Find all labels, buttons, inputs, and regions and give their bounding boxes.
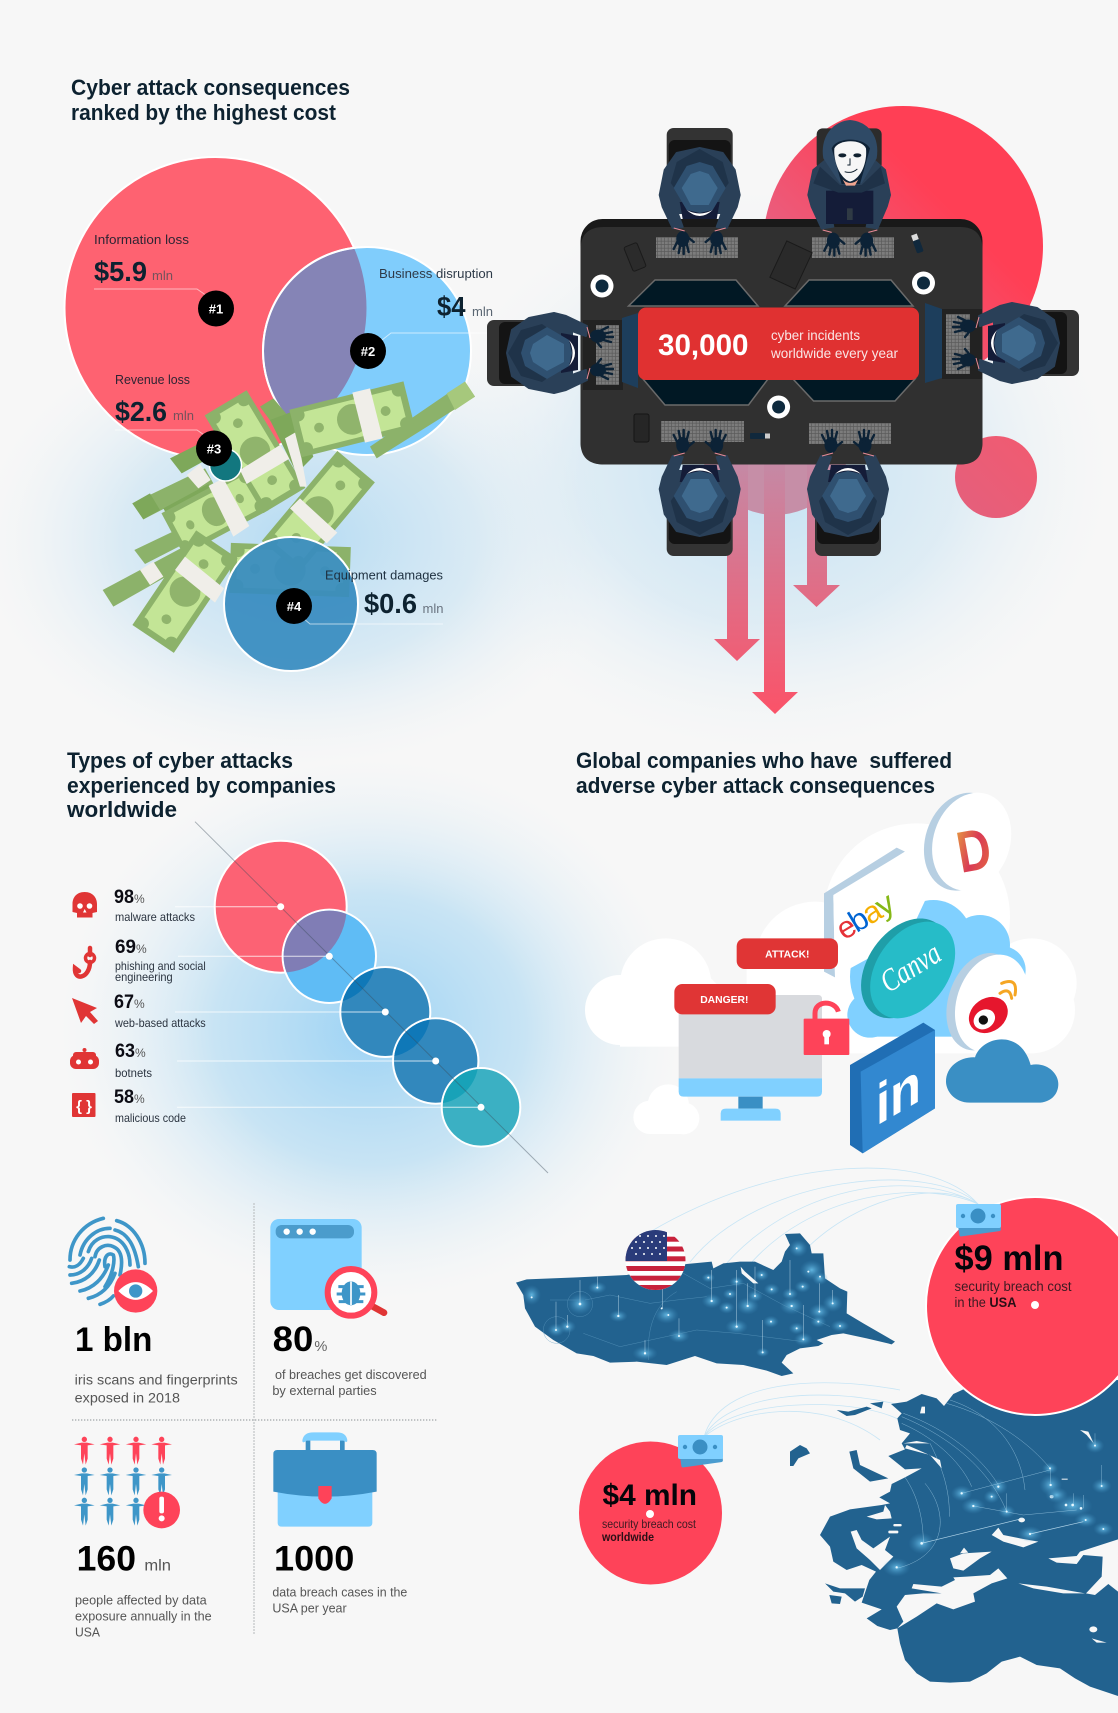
icon: code brackets: { } bbox=[76, 1098, 92, 1115]
overlap 3 bbox=[394, 1020, 430, 1056]
red banner: cyber incidents bbox=[771, 327, 860, 343]
title: types of cyber attacks: Types of cyber attacks bbox=[67, 748, 293, 773]
title: cyber attack consequences bbox=[71, 75, 350, 125]
keyboard: top right bbox=[812, 237, 894, 258]
logo: canva bbox=[843, 902, 973, 1035]
stat: 1 bln bbox=[75, 1321, 238, 1406]
logo: ebay panel: b bbox=[843, 901, 875, 939]
coffee cup 3 bbox=[767, 396, 790, 418]
stat: 1000: 1000 bbox=[274, 1540, 354, 1579]
icon: code brackets bbox=[72, 1093, 96, 1117]
hacker: bottom right bbox=[808, 430, 888, 556]
arrow right bbox=[793, 460, 840, 607]
big red circle bbox=[763, 106, 1043, 386]
list item: malware: 98 bbox=[114, 887, 134, 908]
list item: botnets bbox=[115, 1041, 152, 1080]
diagonal axis bbox=[195, 822, 548, 1173]
logo: linkedin: in bbox=[876, 1049, 921, 1138]
icon: fingerprint bbox=[69, 1218, 145, 1304]
callout: $4 mln: security breach cost bbox=[602, 1517, 697, 1531]
phone bbox=[624, 242, 646, 272]
label: equipment damages: $0.6 bbox=[364, 588, 417, 619]
title: global companies bbox=[576, 748, 952, 798]
stat: 160 mln: exposure annually in the bbox=[75, 1610, 212, 1624]
red banner: worldwide every year bbox=[770, 345, 898, 361]
usb drive 2 bbox=[750, 433, 770, 439]
notebook bbox=[770, 241, 812, 289]
circle: business disruption bbox=[263, 247, 471, 455]
badge #2: #2 bbox=[361, 344, 375, 359]
company cloud illustration bbox=[585, 782, 1077, 1153]
dividers bbox=[72, 1203, 437, 1635]
logo: ebay panel: e bbox=[830, 909, 862, 947]
callout: $9 mln: in the USA bbox=[954, 1295, 1017, 1310]
stat: 1 bln: exposed in 2018 bbox=[75, 1390, 180, 1406]
usa flag bbox=[625, 1230, 687, 1291]
arrow left bbox=[714, 460, 760, 661]
icon: banknote bottom bbox=[678, 1435, 723, 1468]
callout: $4 mln: worldwide bbox=[601, 1530, 654, 1544]
badge #3: #3 bbox=[207, 442, 221, 456]
arrow centre bbox=[752, 460, 798, 714]
icon: hook bbox=[75, 948, 94, 977]
label: revenue loss: $2.6 bbox=[115, 396, 167, 427]
icon: browser window with bug bbox=[270, 1219, 384, 1316]
list item: phishing bbox=[115, 937, 206, 984]
stat: 1000 bbox=[272, 1540, 407, 1616]
stat: 1 bln: iris scans and fingerprints bbox=[75, 1371, 238, 1387]
label: information loss: $5.9 bbox=[94, 256, 147, 287]
label: revenue loss: Revenue loss bbox=[115, 372, 190, 387]
arc white edge bbox=[263, 248, 356, 423]
label: business disruption: mln bbox=[472, 304, 493, 319]
circle overlap bbox=[264, 249, 366, 414]
list item: botnets: botnets bbox=[115, 1066, 152, 1080]
cloud: light blue bbox=[847, 900, 1026, 1038]
monitor: right bbox=[925, 303, 942, 383]
label: equipment damages: mln bbox=[422, 601, 444, 616]
hacker: left bbox=[487, 313, 613, 393]
title: cyber attack consequences: Cyber attack consequences bbox=[71, 75, 350, 100]
phone 2 bbox=[634, 414, 649, 442]
red banner bbox=[638, 308, 919, 380]
stat: 1 bln: 1 bln bbox=[75, 1321, 152, 1359]
list item: phishing: % bbox=[136, 942, 147, 956]
map: USA bbox=[516, 1233, 895, 1376]
callout: $9 mln bbox=[926, 1197, 1118, 1415]
logo: linkedin bbox=[850, 1023, 935, 1153]
title: types of cyber attacks: worldwide bbox=[66, 797, 177, 822]
map arcs bbox=[650, 1168, 978, 1440]
bubble: attack: ATTACK! bbox=[765, 950, 810, 961]
label: revenue loss: mln bbox=[173, 408, 194, 423]
small teal circle bbox=[210, 449, 242, 481]
logo: ebay panel bbox=[824, 848, 930, 977]
icon: cursor bbox=[72, 998, 98, 1024]
circle: information loss bbox=[64, 157, 366, 459]
stat: 160 mln: 160 bbox=[77, 1540, 136, 1579]
map: world bbox=[790, 1380, 1118, 1696]
bubble: danger bbox=[674, 984, 776, 1014]
title: global companies: Global companies who have suffered bbox=[576, 748, 952, 773]
hacker: masked bbox=[808, 120, 890, 256]
badge #4 bbox=[276, 588, 312, 624]
label: business disruption: Business disruption bbox=[379, 266, 493, 281]
background glow: attack types bbox=[60, 760, 680, 1300]
stat grid bbox=[69, 1203, 437, 1640]
logo: dribbble-style D: D bbox=[952, 816, 996, 886]
circle: phishing bbox=[283, 910, 376, 1003]
stat: 160 mln bbox=[75, 1540, 212, 1640]
money pile bbox=[103, 381, 475, 653]
stat: 80% bbox=[272, 1320, 427, 1398]
hacker: top left bbox=[660, 128, 740, 254]
stat: 80%: % bbox=[314, 1338, 327, 1355]
pink circle under table bbox=[700, 365, 850, 515]
keyboard: top left bbox=[656, 237, 738, 258]
icon: robot bbox=[70, 1048, 99, 1069]
monitor: top right bbox=[785, 280, 913, 306]
list item: web-based bbox=[114, 992, 206, 1030]
logo: canva: Canva bbox=[873, 935, 947, 999]
label: business disruption: $4 bbox=[437, 291, 466, 322]
cloud: left white bbox=[585, 938, 724, 1047]
icon: banknote top bbox=[956, 1204, 1001, 1237]
list item: malware: % bbox=[134, 892, 145, 906]
circle: web-based bbox=[340, 967, 430, 1057]
badge #1: #1 bbox=[209, 302, 223, 316]
callout: $9 mln: security breach cost bbox=[954, 1279, 1072, 1294]
list item: botnets: 63 bbox=[115, 1041, 135, 1062]
list item: malicious code: 58 bbox=[114, 1087, 134, 1108]
logo: ebay panel: a bbox=[856, 893, 889, 931]
stat: 1000: data breach cases in the bbox=[272, 1586, 407, 1600]
logo: dribbble-style D bbox=[912, 782, 1024, 901]
monitor bbox=[679, 995, 822, 1121]
cloud: small white bbox=[633, 1084, 699, 1134]
title: types of cyber attacks bbox=[66, 748, 336, 822]
label: information loss: mln bbox=[152, 268, 173, 283]
monitor: left bbox=[622, 313, 638, 388]
label: business disruption bbox=[379, 266, 516, 340]
stat: 160 mln: mln bbox=[144, 1558, 171, 1575]
small red circle bbox=[955, 436, 1037, 518]
overlap 4 bbox=[443, 1069, 478, 1103]
keyboard: bottom right bbox=[809, 423, 891, 444]
label: information loss bbox=[94, 232, 207, 296]
title: types of cyber attacks: experienced by companies bbox=[67, 773, 336, 798]
circle: botnets bbox=[393, 1018, 478, 1104]
icon: briefcase bbox=[273, 1432, 377, 1527]
list item: web-based: % bbox=[134, 997, 145, 1011]
callout: $4 mln: $4 mln bbox=[602, 1479, 697, 1512]
keyboard: left bbox=[583, 320, 623, 390]
badge #4: #4 bbox=[287, 599, 302, 614]
bubble: attack bbox=[737, 938, 838, 969]
overlap 1 bbox=[284, 910, 346, 972]
circle: malware bbox=[215, 841, 347, 973]
list item: web-based: web-based attacks bbox=[114, 1016, 206, 1030]
list item: malware: malware attacks bbox=[115, 910, 195, 924]
label: information loss: Information loss bbox=[94, 232, 190, 247]
callout: $9 mln: $9 mln bbox=[954, 1239, 1064, 1278]
leader lines bbox=[175, 907, 481, 1107]
overlap 2 bbox=[342, 970, 374, 1001]
stat: 80%: of breaches get discovered bbox=[275, 1368, 427, 1382]
logo: weibo bbox=[935, 944, 1040, 1062]
monitor: top left bbox=[628, 280, 758, 306]
stat: 1000: USA per year bbox=[272, 1602, 347, 1616]
label: equipment damages: Equipment damages bbox=[325, 568, 443, 582]
list item: botnets: % bbox=[135, 1046, 146, 1060]
list item: malicious code: malicious code bbox=[115, 1111, 186, 1125]
icon: skull bbox=[72, 892, 97, 918]
stat: 80%: by external parties bbox=[272, 1384, 377, 1398]
badge #3 bbox=[196, 430, 232, 466]
logo: ebay panel: y bbox=[869, 885, 901, 923]
stat: 80%: 80 bbox=[273, 1320, 313, 1359]
circle: malicious code bbox=[442, 1068, 520, 1147]
badge #1 bbox=[198, 290, 234, 326]
diagonal circles chart bbox=[175, 822, 548, 1173]
coffee cup 1 bbox=[590, 274, 614, 298]
icon: people bbox=[74, 1437, 180, 1528]
background glow: money bbox=[0, 315, 620, 765]
keyboard: right bbox=[942, 309, 982, 379]
stat: 160 mln: USA bbox=[75, 1626, 101, 1640]
bubble: danger: DANGER! bbox=[700, 995, 748, 1006]
list item: phishing: engineering bbox=[115, 970, 173, 984]
red banner: 30,000 bbox=[658, 329, 748, 362]
coffee cup 2 bbox=[912, 272, 935, 294]
monitor: bottom right bbox=[793, 379, 915, 401]
background glow: table bbox=[430, 190, 1110, 750]
list item: phishing: 69 bbox=[115, 937, 136, 958]
title: cyber attack consequences: ranked by the highest cost bbox=[71, 100, 337, 125]
table bbox=[580, 219, 982, 464]
cloud: dark blue bbox=[946, 1039, 1058, 1103]
cloud: big white bbox=[747, 823, 1077, 1053]
hacker: right bbox=[953, 303, 1079, 383]
list item: malicious code: % bbox=[134, 1092, 145, 1106]
monitor: bottom left bbox=[643, 379, 768, 405]
list item: malicious code bbox=[114, 1087, 186, 1125]
circle: equipment damages bbox=[224, 537, 358, 671]
keyboard: bottom left bbox=[661, 421, 744, 442]
label: revenue loss bbox=[115, 372, 207, 437]
usb drive bbox=[911, 233, 924, 254]
list item: malware bbox=[114, 887, 195, 924]
hacker: bottom left bbox=[660, 430, 740, 556]
callout: $4 mln bbox=[579, 1442, 722, 1584]
dots bbox=[277, 903, 484, 1111]
badge #2 bbox=[350, 333, 386, 369]
title: global companies: adverse cyber attack consequences bbox=[576, 773, 935, 798]
icon: eye bbox=[114, 1269, 157, 1313]
list item: phishing: phishing and social bbox=[115, 959, 206, 973]
list item: web-based: 67 bbox=[114, 992, 134, 1013]
stat: 160 mln: people affected by data bbox=[75, 1593, 208, 1607]
icon: open lock bbox=[804, 1003, 849, 1055]
label: equipment damages bbox=[303, 568, 444, 624]
